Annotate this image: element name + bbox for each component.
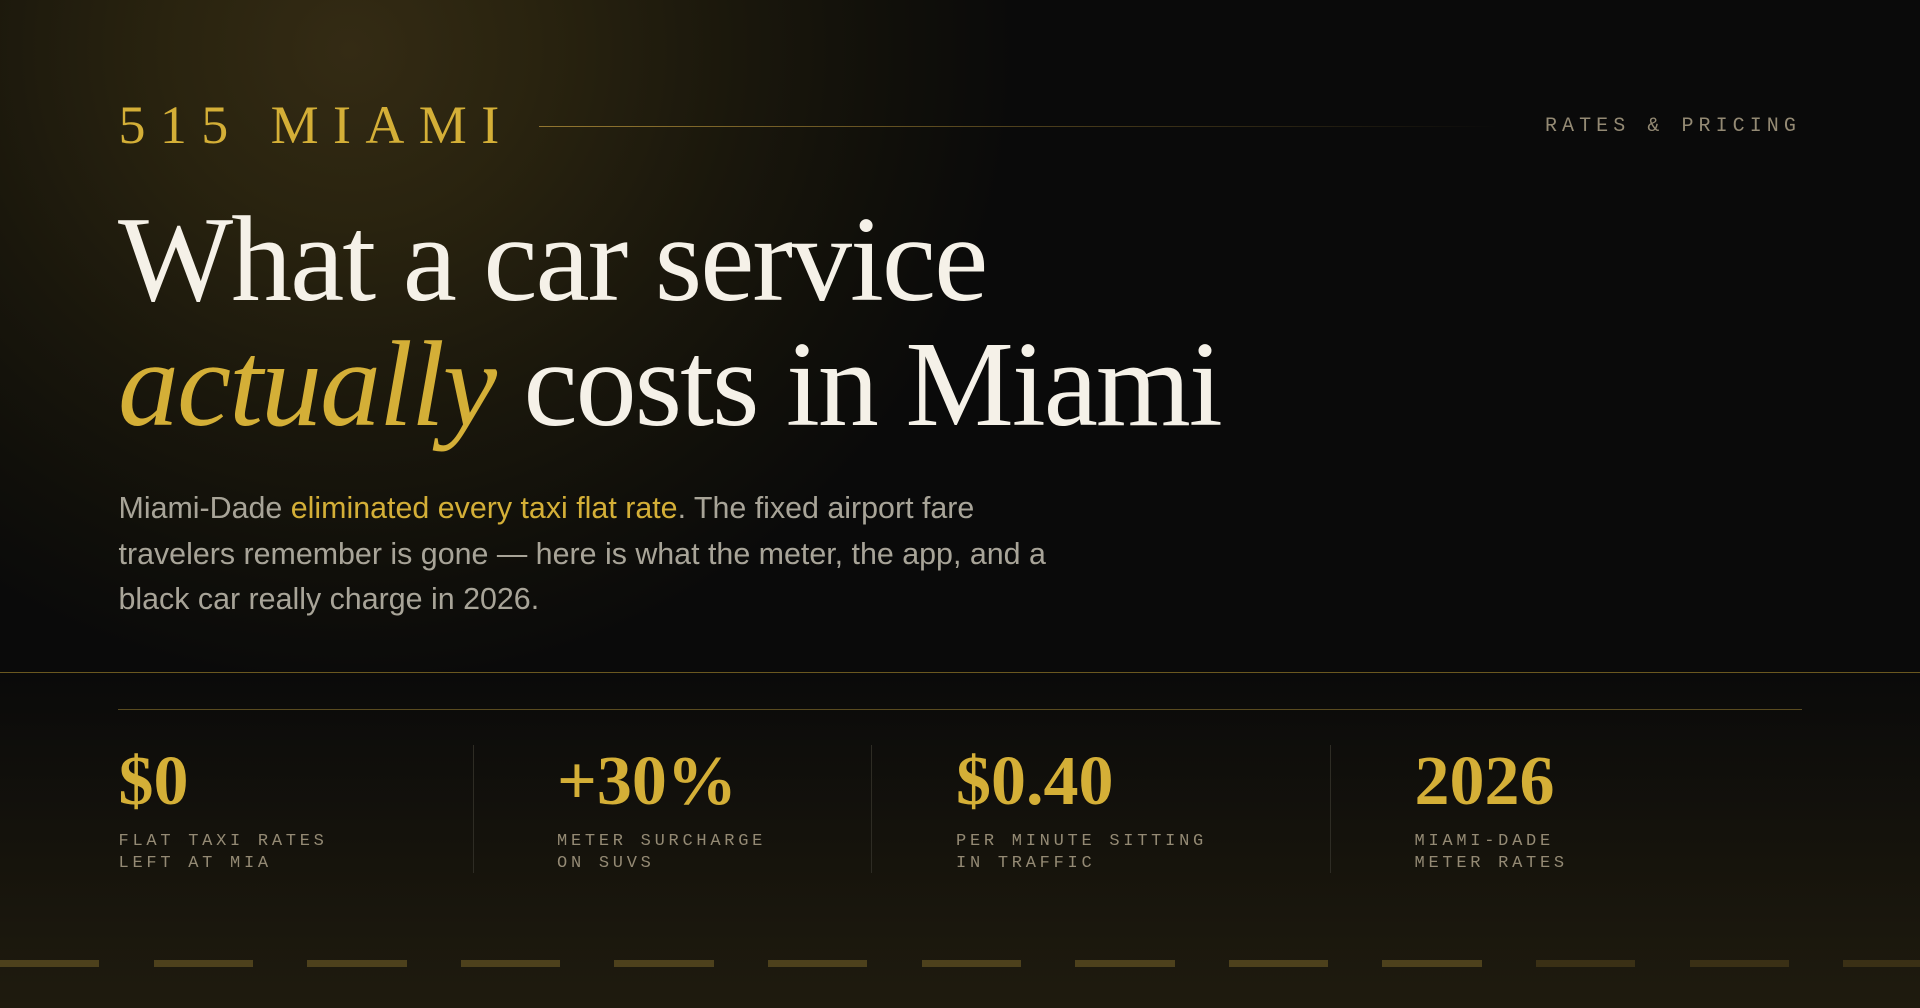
stat label: [557, 832, 766, 873]
stat label: [1414, 832, 1568, 873]
stat value: +30%: [557, 743, 737, 820]
stat label: [118, 832, 328, 873]
stat label: FLAT TAXI RATES: [118, 832, 328, 851]
intro text: Miami-Dade eliminated every taxi flat rate. The fixed airport fare: [118, 491, 974, 525]
intro text: [118, 491, 1046, 616]
stat label: LEFT AT MIA: [118, 854, 272, 873]
stat label: IN TRAFFIC: [956, 854, 1095, 873]
stat label: [956, 832, 1207, 873]
stat label: METER RATES: [1414, 854, 1568, 873]
stat value: $0: [118, 743, 188, 820]
stat value: 2026: [1414, 743, 1554, 820]
title: [118, 192, 1221, 452]
intro text: black car really charge in 2026.: [118, 582, 539, 616]
stat label: METER SURCHARGE: [557, 832, 766, 851]
stat: SUV surcharge: [557, 743, 766, 873]
road dashes: [0, 960, 1920, 967]
stat value: $0.40: [956, 743, 1114, 820]
bottom stats band background: [0, 672, 1920, 1008]
title: What a car service: [118, 192, 986, 327]
stat label: ON SUVS: [557, 854, 655, 873]
stat: meter rates year: [1414, 743, 1568, 873]
stat label: PER MINUTE SITTING: [956, 832, 1207, 851]
stat: per minute in traffic: [956, 743, 1207, 873]
stat: flat taxi rates: [118, 743, 328, 873]
section tag: RATES & PRICING: [1545, 115, 1801, 138]
stat label: MIAMI-DADE: [1414, 832, 1554, 851]
intro text: travelers remember is gone — here is what the meter, the app, and a: [118, 536, 1046, 570]
brand name: 515 MIAMI: [118, 95, 514, 155]
title: actually costs in Miami: [118, 317, 1221, 452]
